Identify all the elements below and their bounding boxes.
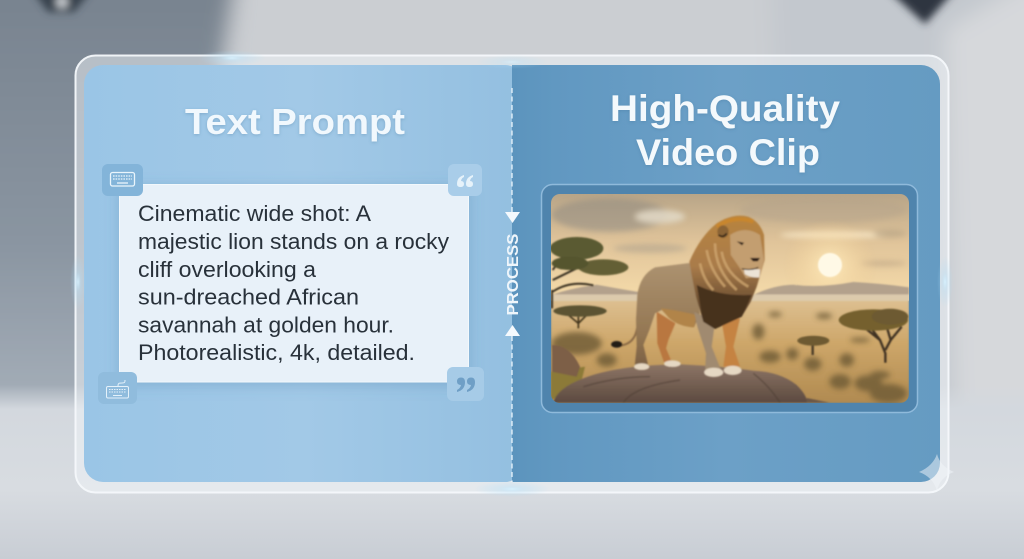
sky [551,194,909,312]
lion photo [550,194,909,403]
icon: closing quote [447,367,484,401]
prompt text: savannah at golden hour. [138,312,394,338]
savannah [551,282,909,403]
mane [689,216,765,329]
glow accents on the frame [70,50,953,497]
face [730,230,764,278]
heading: High-Quality Video Clip: Video Clip [636,132,820,173]
heading: High-Quality Video Clip [610,88,840,173]
prompt text: majestic lion stands on a rocky [138,229,449,254]
near front leg [694,312,722,372]
process label: PROCESS [505,234,522,316]
lion [611,216,765,377]
left foreground grass, boulder and rock [551,345,830,403]
glass outer frame [76,56,948,492]
icon: keyboard bottom left [98,372,137,404]
process divider with arrows [505,88,522,482]
icon: keyboard top left [102,164,143,196]
video frame [542,184,918,412]
arrow: down [505,212,520,223]
icon: opening quote [448,164,482,196]
heading: Text Prompt: Text Prompt [185,101,405,142]
prompt text: sun-dreached African [138,284,359,310]
prompt text: cliff overlooking a [138,257,317,282]
prompt text: Cinematic wide shot: A [138,201,371,226]
bushes [552,312,907,403]
icon: sparkle [919,454,954,491]
heading: High-Quality Video Clip: High-Quality [610,88,840,129]
panel: text prompt (left) [84,65,524,482]
panel: video clip (right) [512,65,940,482]
prompt text: Photorealistic, 4k, detailed. [138,340,415,365]
paws [634,360,742,377]
body [635,263,700,366]
far legs [657,312,675,362]
prompt text card [120,184,468,382]
acacia trees [550,237,908,363]
arrow: up [505,325,520,336]
prompt text [138,201,449,365]
